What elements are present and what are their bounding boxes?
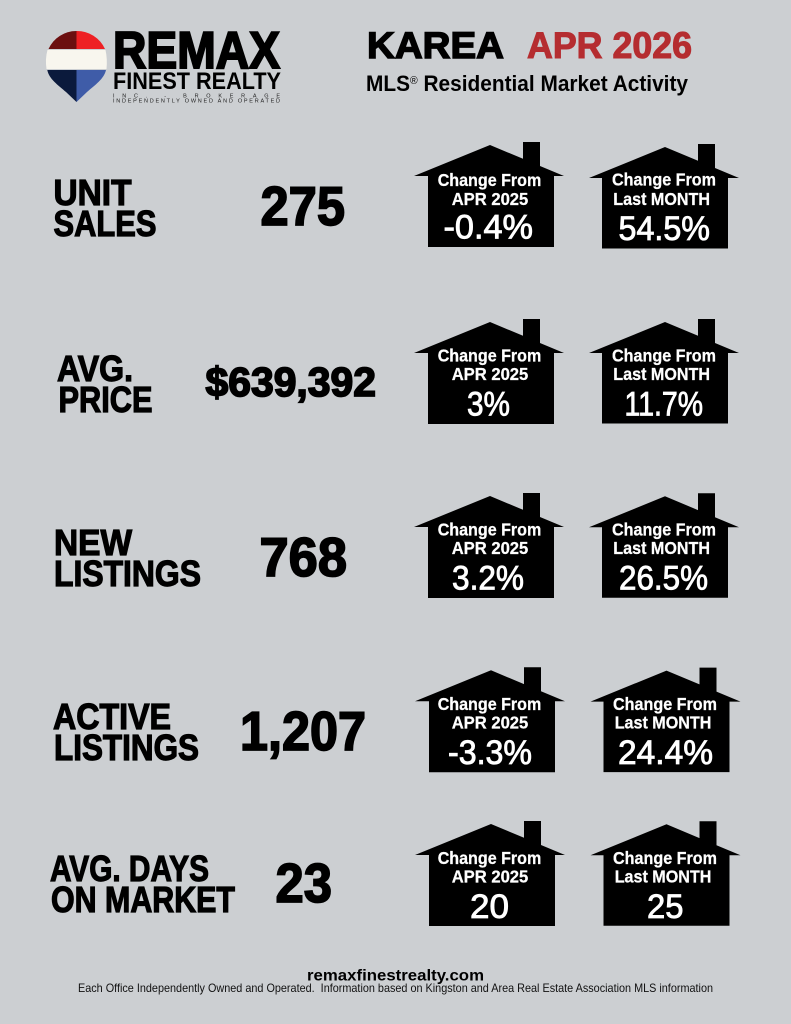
row: new listings [54,493,739,598]
logo: RE/MAX Finest Realty [46,22,281,104]
house: change from last year: Change From [438,170,541,190]
house: change from last year: APR 2025 [452,364,529,384]
house: change from last year: APR 2025 [452,866,529,886]
house: change from last year: APR 2025 [452,712,529,732]
label: average price [57,348,152,420]
house: change from last month [589,319,739,424]
subheading: ® [410,75,418,87]
house: change from last month: Change From [612,346,716,366]
logo independence line: INDEPENDENTLY OWNED AND OPERATED [113,98,280,104]
footer website: remaxfinestrealty.com [307,968,484,984]
house: change from last month: 11.7% [624,386,703,424]
label: unit sales: SALES [54,203,156,244]
value: 768: 768 [260,526,347,588]
house: change from last year: 3% [467,386,510,424]
footer disclaimer: Each Office Independently Owned and Operated. Information based on Kingston and Area Real Estate Association MLS information [78,981,713,995]
house: change from last year [414,493,564,598]
label: average days on market: ON MARKET [51,879,235,920]
heading: date: APR 2026 [527,25,692,66]
subheading: Residential Market Activity [418,71,689,96]
row: average days on market [50,821,740,926]
house: change from last month: 54.5% [618,210,710,248]
label: average days on market: AVG. DAYS [50,848,209,889]
label: active listings [53,696,199,768]
value: 275: 275 [260,175,345,237]
house: change from last month: Change From [612,520,716,540]
house: change from last month: 25 [647,888,684,926]
house: change from last year: Change From [438,848,541,868]
label: active listings: LISTINGS [54,727,199,768]
house: change from last month [590,821,740,926]
logo subtitle: FINEST REALTY [113,68,281,95]
label: average price: PRICE [58,379,152,420]
house: change from last month: Last MONTH [613,364,710,384]
house: change from last month [590,668,740,772]
value: $639,392: $639,392 [206,359,376,405]
house: change from last year [414,142,564,247]
label: average days on market [50,848,235,920]
house: change from last month: Last MONTH [615,712,711,732]
heading: region: KAREA [367,25,504,66]
house: change from last month [589,493,739,598]
logo wordmark: REMAX [113,22,280,80]
house: change from last year [415,667,565,772]
house: change from last year [415,821,565,926]
icon: balloon pin [46,31,107,102]
label: active listings: ACTIVE [53,696,171,737]
house: change from last year: APR 2025 [452,538,529,558]
house: change from last month: Change From [613,694,717,714]
house: change from last year: Change From [438,520,541,540]
house: change from last year: Change From [438,694,541,714]
label: unit sales [54,172,156,244]
house: change from last month: Change From [612,170,716,190]
house: change from last year [414,319,564,424]
house: change from last month [589,144,739,248]
house: change from last month: 24.4% [618,734,713,772]
label: new listings: LISTINGS [54,553,201,594]
house: change from last month: Last MONTH [613,189,710,209]
house: change from last year: -0.4% [444,208,533,246]
house: change from last year: APR 2025 [452,189,529,209]
house: change from last month: 26.5% [619,559,708,597]
house: change from last month: Change From [613,848,717,868]
house: change from last year: -3.3% [448,734,532,772]
value: 23: 23 [276,852,332,914]
row: average price [57,319,739,424]
row: unit sales [54,142,739,248]
label: average price: AVG. [57,348,133,389]
house: change from last year: 20 [470,888,509,926]
row: active listings [53,667,740,772]
value: 1,207: 1,207 [240,700,366,762]
house: change from last month: Last MONTH [615,866,711,886]
logo brokerage line: INC. - BROKERAGE [113,94,280,100]
house: change from last month: Last MONTH [613,538,710,558]
label: unit sales: UNIT [54,172,132,213]
label: new listings [54,522,201,594]
house: change from last year: Change From [438,346,541,366]
subheading: MLS [366,71,412,96]
house: change from last year: 3.2% [452,560,524,598]
label: new listings: NEW [54,522,132,563]
